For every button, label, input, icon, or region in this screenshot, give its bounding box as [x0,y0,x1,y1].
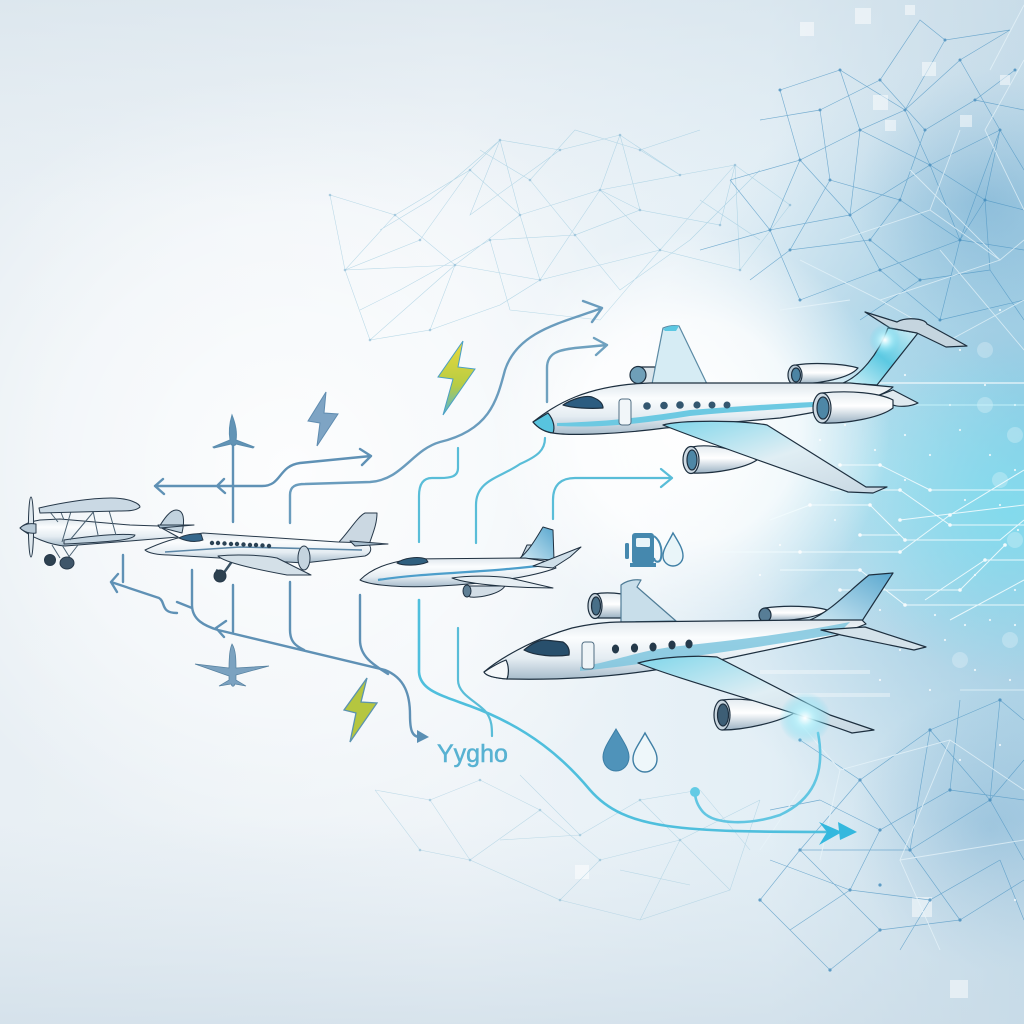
network mesh: top right [700,5,1024,350]
top airliner far engine [640,367,655,384]
lower airliner tail fin [810,573,893,621]
business jet windshield [179,534,203,541]
line: branch into trunk from small jet [360,595,388,674]
business jet engine [298,546,310,570]
small jet stripe [378,564,552,580]
business jet windows [210,541,271,548]
icon: lightning bolt yellow lower [344,678,377,742]
pale floating squares [575,5,1010,998]
lower airliner windshield [524,640,569,656]
small jet fuselage [360,558,556,587]
icon: outline drop near fuel [663,533,683,566]
top airliner near engine [822,392,893,423]
business jet stabiliser [350,541,388,546]
top airliner door [619,399,631,425]
top airliner windows [643,401,730,410]
lower airliner windows [612,640,693,654]
label: garbled word: Yygho [437,740,508,768]
line: stub joining lower trunk [177,602,192,608]
small jet tail fin [520,527,554,560]
arrowhead: hook [690,787,700,797]
arrow: stepped line from biplane [111,555,177,613]
arrowhead: long cyan curve [819,822,857,845]
top airliner rear engine [796,364,858,384]
icon: lightning bolt yellow top [438,341,475,415]
top airliner lower engine [692,446,757,473]
biplane tail [159,510,184,533]
icon: lightning bolt steel [308,392,338,446]
small jet stabiliser [533,547,581,568]
lower airliner near wing [638,656,874,733]
biplane stabiliser [158,525,194,528]
line: long cyan curve to bottom right [419,600,835,832]
lower airliner door [582,642,594,669]
plane: top airliner [533,312,967,493]
plane: biplane [20,497,194,569]
top airliner near wing [663,421,887,493]
line: lower trunk with arrow [192,570,420,737]
lower airliner nose cap [484,660,508,679]
arrow: cyan to top airliner [553,469,672,519]
small jet windshield [397,558,428,565]
business jet stripe [165,547,362,552]
flow lines: steel blue [111,301,607,737]
line: vertical below business jet [232,585,234,632]
arrow: hook from lower airliner [695,733,820,822]
top airliner nose cap [533,413,554,433]
line: branch to label [458,628,492,736]
top airliner cyan stripe [557,402,813,427]
icon: turbine [213,415,254,448]
business jet landing gear [216,560,233,574]
arrow: branch to top airliner [547,338,607,402]
icon: filled water drop [603,729,629,771]
icon: outline water drop [633,733,657,772]
flare: tail of top airliner [869,324,901,356]
glowing light streaks [640,383,1024,695]
lower airliner far engine [595,593,622,618]
flare: wing of lower airliner [779,692,831,744]
top airliner small stabiliser [880,390,918,406]
line: short stepped cyan upper [419,448,458,542]
top airliner far wing fin [652,326,707,384]
small jet engine [465,586,505,597]
arrow: turbine vertical upper [232,445,234,522]
arrow: horizontal branch to the left and right [155,449,371,494]
plane: lower airliner [484,573,926,733]
network mesh: bottom right [760,690,1024,970]
arrow: long curve up to top airliner [290,301,602,523]
biplane lower wing [64,534,135,544]
plane: business jet [145,513,388,582]
small jet wing [452,576,553,588]
lower airliner fuselage [484,620,866,679]
line: cyan curve to airliner [476,438,545,543]
network mesh: bottom centre [375,775,760,920]
lower airliner lower engine [722,699,796,730]
top airliner fuselage [533,383,893,434]
small jet far fin [520,545,534,560]
biplane fuselage [20,519,178,546]
icon: small jet silhouette [195,644,269,686]
icon: fuel pump [625,533,661,567]
flow lines: cyan [419,438,835,832]
line: branch into trunk [290,582,304,650]
business jet wing [218,555,311,575]
top airliner t-tail [865,312,967,347]
biplane struts [50,506,116,558]
circuit traces [720,310,1024,900]
top airliner tail fin [843,328,918,385]
arrowhead: lower trunk [417,730,429,743]
business jet tail fin [338,513,377,545]
biplane upper wing [39,498,140,513]
lower airliner stabiliser [821,627,926,650]
biplane spinner [20,524,36,533]
top airliner windshield [563,396,603,408]
lower airliner blue stripe [580,622,850,671]
plane: small swept jet [360,527,581,597]
biplane propeller [28,497,34,557]
lower airliner far fin [621,580,676,622]
network mesh: top centre [330,130,790,340]
top airliner wing cap [663,326,679,331]
biplane wheels [44,554,56,566]
business jet fuselage [145,533,371,563]
lower airliner rear engine [765,606,827,621]
